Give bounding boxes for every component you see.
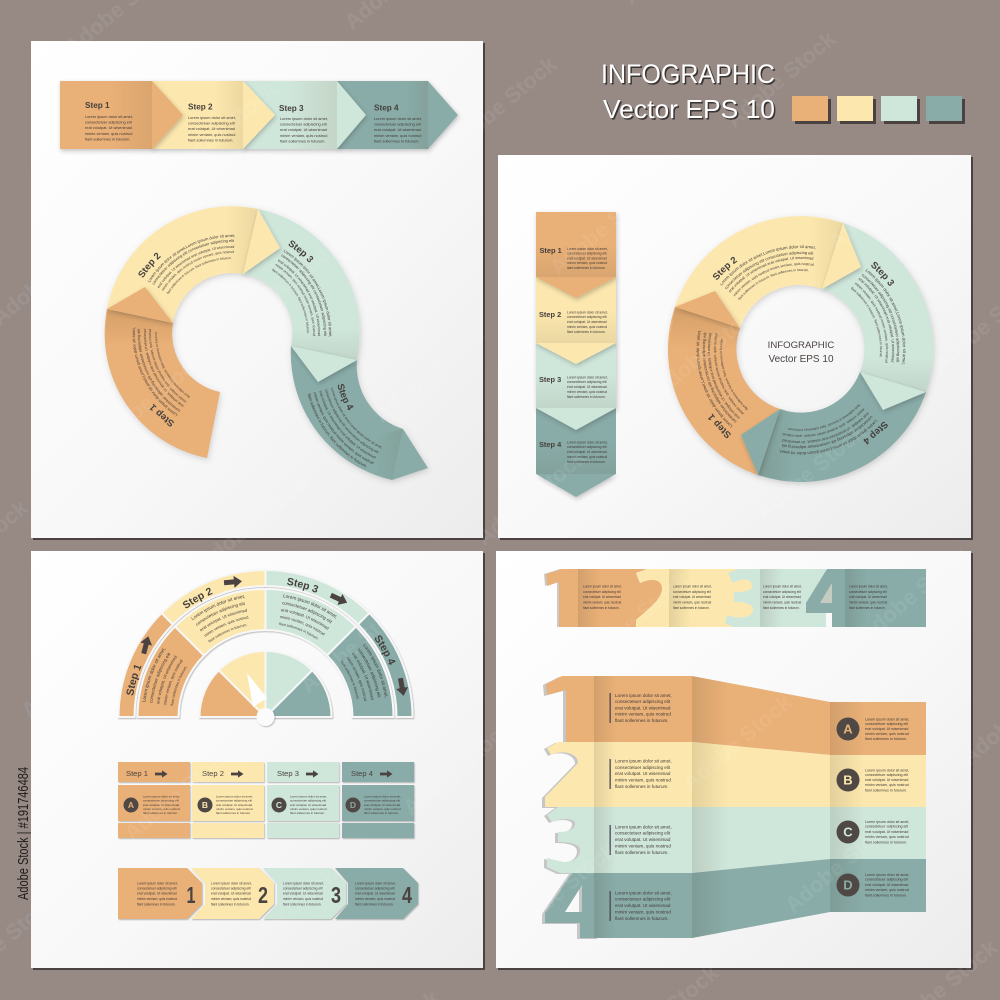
circular process ring: Step 3 (871, 262, 894, 286)
numbered chevron row: flant sollemnes in futurum. (137, 902, 176, 906)
folded ribbon list with numerals: erat volutpat. Ut wisenimad (615, 903, 671, 908)
horizontal arrow process bar: flant sollemnes in futurum. (188, 137, 233, 142)
curved S-shaped process: erat volutpat. Ut wisenimad erat volutpat. Ut wisenimad (278, 260, 321, 336)
step cards grid: consectetuer adipiscing elit (216, 799, 252, 803)
header title: Vector EPS 10 (603, 94, 775, 124)
numeral puzzle strip: Lorem ipsum dolor sit amet, (673, 585, 712, 589)
semicircle gauge: Lorem ipsum dolor sit amet, (141, 645, 167, 704)
semicircle gauge: flant sollemnes in futurum. (170, 664, 188, 707)
horizontal arrow process bar: Step 3 (279, 104, 304, 113)
circular process ring: minim veniam, quis nostrud minim veniam, quis nostrud (734, 262, 814, 296)
numeral puzzle strip: minim veniam, quis nostrud (583, 600, 621, 604)
folded ribbon list with numerals: flant sollemnes in futurum. (615, 916, 669, 921)
circular process ring: consectetuer adipiscing elit consectetuer adipiscing elit (779, 383, 874, 481)
step cards grid: minim veniam, quis nostrud (143, 807, 180, 811)
horizontal arrow process bar: erat volutpat. Ut wisenimad (188, 126, 235, 131)
numeral puzzle strip: minim veniam, quis nostrud (673, 600, 711, 604)
numbered chevron row: 4 (402, 882, 412, 908)
numeral puzzle strip: minim veniam, quis nostrud (763, 600, 801, 604)
horizontal arrow process bar: minim veniam, quis nostrud (188, 132, 235, 137)
circular process ring: erat volutpat. Ut wisenimad erat volutpat. Ut wisenimad (780, 382, 870, 473)
header title: INFOGRAPHIC (601, 59, 775, 89)
folded ribbon list with numerals: erat volutpat. Ut wisenimad (865, 778, 908, 782)
panel: top left (31, 41, 485, 540)
header title: Vector EPS 10 (604, 96, 776, 126)
vertical chevron process column: Step 4 (539, 440, 562, 449)
curved S-shaped process: minim veniam, quis nostrud minim veniam, quis nostrud (148, 329, 186, 402)
numbered chevron row: flant sollemnes in futurum. (211, 902, 250, 906)
step cards grid: erat volutpat. Ut wisenimad (143, 803, 180, 807)
folded ribbon list with numerals: flant sollemnes in futurum. (865, 894, 907, 898)
vertical chevron process column: consectetuer adipiscing elit (567, 315, 607, 319)
semicircle gauge: minim veniam, quis nostrud (336, 655, 377, 703)
numbered chevron row: Lorem ipsum dolor sit amet, (283, 882, 324, 886)
circular process ring: erat volutpat. Ut wisenimad erat volutpat. Ut wisenimad (729, 256, 814, 292)
numeral puzzle strip: Lorem ipsum dolor sit amet, (583, 585, 622, 589)
numbered chevron row: flant sollemnes in futurum. (283, 902, 322, 906)
curved S-shaped process: flant sollemnes in futurum. flant sollemnes in futurum. (155, 332, 190, 398)
curved S-shaped process: flant sollemnes in futurum. flant sollemnes in futurum. (272, 268, 309, 334)
step cards grid: consectetuer adipiscing elit (364, 799, 400, 803)
circular process ring: consectetuer adipiscing elit consectetuer adipiscing elit (725, 251, 814, 290)
folded ribbon list with numerals: erat volutpat. Ut wisenimad (865, 727, 908, 731)
folded ribbon list with numerals: Lorem ipsum dolor sit amet, (615, 824, 672, 830)
numbered chevron row (118, 868, 418, 919)
semicircle gauge: Step 1 (124, 662, 145, 697)
circular process ring: Lorem ipsum dolor sit amet,Lorem ipsum dolor sit amet, (720, 244, 816, 286)
folded ribbon list with numerals: minim veniam, quis nostrud (865, 732, 909, 736)
semicircle gauge: minim veniam, quis nostrud (203, 605, 251, 647)
numbered chevron row: consectetuer adipiscing elit (211, 887, 251, 891)
curved S-shaped process: Lorem ipsum dolor sit amet,Lorem ipsum dolor sit amet, (331, 388, 382, 449)
vertical chevron process column: Lorem ipsum dolor sit amet, (567, 376, 608, 380)
numbered chevron row: flant sollemnes in futurum. (355, 902, 394, 906)
vertical chevron process column: Step 1 (540, 246, 562, 255)
numeral puzzle strip: erat volutpat. Ut wisenimad (763, 595, 801, 599)
numbered chevron row: erat volutpat. Ut wisenimad (283, 892, 323, 896)
vertical chevron process column: erat volutpat. Ut wisenimad (567, 256, 607, 260)
circular process ring: Lorem ipsum dolor sit amet,Lorem ipsum dolor sit amet, (696, 330, 732, 428)
vertical chevron process column: consectetuer adipiscing elit (567, 380, 607, 384)
numbered chevron row: minim veniam, quis nostrud (137, 897, 177, 901)
horizontal arrow process bar: minim veniam, quis nostrud (85, 131, 132, 136)
numeral puzzle strip: Lorem ipsum dolor sit amet, (763, 585, 802, 589)
vertical chevron process column: Lorem ipsum dolor sit amet, (567, 310, 608, 314)
folded ribbon list with numerals: consectetuer adipiscing elit (865, 722, 908, 726)
numeral puzzle strip: flant sollemnes in futurum. (673, 606, 710, 610)
semicircle gauge: Lorem ipsum dolor sit amet, (281, 593, 341, 620)
panel: bottom right (496, 551, 973, 970)
curved S-shaped process: erat volutpat. Ut wisenimad erat volutpat. Ut wisenimad (158, 245, 234, 288)
vertical chevron process column: Step 3 (539, 375, 561, 384)
step cards grid: flant sollemnes in futurum. (216, 811, 251, 815)
stock credit vertical text: Adobe Stock | #191746484 (15, 767, 32, 900)
semicircle gauge: erat volutpat. Ut wisenimad (279, 607, 332, 631)
numbered chevron row: consectetuer adipiscing elit (283, 887, 323, 891)
folded ribbon list with numerals: Lorem ipsum dolor sit amet, (615, 759, 672, 764)
numbered chevron row: 3 (331, 882, 341, 908)
step cards grid: flant sollemnes in futurum. (143, 811, 178, 815)
horizontal arrow process bar: Lorem ipsum dolor sit amet, (188, 115, 236, 120)
folded ribbon list with numerals: minim veniam, quis nostrud (615, 712, 671, 717)
step cards grid: Lorem ipsum dolor sit amet, (364, 794, 401, 798)
numeral puzzle strip: flant sollemnes in futurum. (849, 606, 886, 610)
icon: letter badges: A (128, 800, 134, 810)
numeral puzzle strip: erat volutpat. Ut wisenimad (673, 595, 711, 599)
circular process ring: consectetuer adipiscing elit consectetuer adipiscing elit (702, 332, 736, 422)
step cards grid: Step 2 (202, 769, 224, 778)
curved S-shaped process: Lorem ipsum dolor sit amet,Lorem ipsum dolor sit amet, (284, 250, 332, 337)
folded ribbon list with numerals: consectetuer adipiscing elit (615, 897, 671, 902)
horizontal arrow process bar: flant sollemnes in futurum. (374, 138, 419, 143)
vertical chevron process column: erat volutpat. Ut wisenimad (567, 320, 607, 324)
folded ribbon list with numerals: minim veniam, quis nostrud (615, 909, 671, 914)
semicircle gauge: Step 2 (180, 582, 216, 615)
icon: card arrows (155, 770, 392, 778)
curved S-shaped process (103, 206, 430, 484)
folded ribbon list with numerals: erat volutpat. Ut wisenimad (615, 706, 671, 710)
horizontal arrow process bar: Lorem ipsum dolor sit amet, (280, 116, 328, 121)
semicircle gauge: flant sollemnes in futurum. (332, 660, 368, 702)
folded ribbon list with numerals: flant sollemnes in futurum. (865, 788, 907, 792)
step cards grid: erat volutpat. Ut wisenimad (216, 803, 253, 807)
panel: bottom left (31, 551, 485, 970)
vertical chevron process column: consectetuer adipiscing elit (567, 252, 607, 256)
curved S-shaped process: flant sollemnes in futurum. flant sollemnes in futurum. (166, 257, 232, 294)
step cards grid: Lorem ipsum dolor sit amet, (216, 794, 253, 798)
numbered chevron row: 2 (258, 882, 268, 908)
circular process ring: Lorem ipsum dolor sit amet,Lorem ipsum dolor sit amet, (777, 385, 879, 489)
horizontal arrow process bar: minim veniam, quis nostrud (280, 133, 327, 138)
folded ribbon list with numerals: flant sollemnes in futurum. (615, 718, 669, 723)
step cards grid: Lorem ipsum dolor sit amet, (290, 794, 327, 798)
numbered chevron row: consectetuer adipiscing elit (137, 887, 177, 891)
folded ribbon list with numerals: flant sollemnes in futurum. (865, 737, 907, 741)
numeral puzzle strip: consectetuer adipiscing elit (849, 590, 887, 594)
folded ribbon list with numerals: Lorem ipsum dolor sit amet, (865, 718, 909, 722)
semicircle gauge: minim veniam, quis nostrud (278, 614, 328, 637)
horizontal arrow process bar (60, 81, 458, 149)
step cards grid: consectetuer adipiscing elit (290, 799, 326, 803)
ring centre label: INFOGRAPHIC (768, 340, 834, 351)
colour swatches (792, 96, 965, 124)
curved S-shaped process: Step 4 (338, 384, 354, 410)
numbered chevron row: 1 (186, 882, 196, 908)
numbered chevron row: erat volutpat. Ut wisenimad (355, 892, 395, 896)
curved S-shaped process: minim veniam, quis nostrud minim veniam, quis nostrud (275, 264, 316, 336)
curved S-shaped process: minim veniam, quis nostrud minim veniam, quis nostrud (314, 392, 374, 464)
numeral shadows (542, 677, 597, 939)
numbered chevron row: Lorem ipsum dolor sit amet, (211, 882, 252, 886)
icon: ribbon letter badges: C (843, 825, 853, 840)
numeral puzzle strip: minim veniam, quis nostrud (849, 600, 887, 604)
vertical chevron process column: minim veniam, quis nostrud (567, 455, 607, 459)
folded ribbon list with numerals: flant sollemnes in futurum. (615, 850, 669, 855)
vertical chevron process column: Lorem ipsum dolor sit amet, (567, 440, 608, 444)
curved S-shaped process: erat volutpat. Ut wisenimad erat volutpat. Ut wisenimad (320, 390, 376, 459)
numbered chevron row: erat volutpat. Ut wisenimad (137, 892, 177, 896)
vertical chevron process column: Step 2 (539, 310, 561, 319)
icon: ribbon letter badges (836, 718, 860, 896)
step cards grid: minim veniam, quis nostrud (216, 807, 253, 811)
curved S-shaped process: Step 1 (150, 404, 174, 426)
semicircle gauge: flant sollemnes in futurum. (208, 615, 249, 651)
numeral puzzle strip: consectetuer adipiscing elit (583, 590, 621, 594)
semicircle gauge: consectetuer adipiscing elit (148, 649, 172, 705)
numbered chevron row: minim veniam, quis nostrud (283, 897, 323, 901)
curved S-shaped process: Step 3 (288, 240, 314, 262)
vertical chevron process column: erat volutpat. Ut wisenimad (567, 385, 607, 389)
horizontal arrow process bar: flant sollemnes in futurum. (280, 138, 325, 143)
folded ribbon list with numerals: erat volutpat. Ut wisenimad (615, 837, 671, 842)
vertical chevron process column: minim veniam, quis nostrud (567, 390, 607, 394)
curved S-shaped process: consectetuer adipiscing elit consectetuer adipiscing elit (152, 239, 234, 285)
curved S-shaped process: consectetuer adipiscing elit consectetuer adipiscing elit (137, 328, 180, 412)
numbered chevron row: erat volutpat. Ut wisenimad (211, 892, 251, 896)
step cards grid: consectetuer adipiscing elit (143, 799, 179, 803)
circular process ring: Step 2 (712, 256, 738, 280)
horizontal arrow process bar: Step 1 (85, 101, 110, 110)
semicircle gauge: Lorem ipsum dolor sit amet, (351, 643, 400, 700)
folded ribbon list with numerals: flant sollemnes in futurum. (865, 840, 907, 844)
folded ribbon list with numerals: erat volutpat. Ut wisenimad (865, 830, 908, 834)
circular process ring: Step 4 (864, 422, 888, 444)
semicircle gauge (118, 571, 415, 728)
semicircle gauge: consectetuer adipiscing elit (194, 590, 248, 637)
vertical chevron process column: flant sollemnes in futurum. (567, 395, 606, 399)
folded ribbon list with numerals: erat volutpat. Ut wisenimad (865, 883, 908, 887)
horizontal arrow process bar: erat volutpat. Ut wisenimad (85, 125, 132, 130)
numeral puzzle strip (544, 569, 926, 627)
horizontal arrow process bar: consectetuer adipiscing elit (85, 120, 133, 125)
step cards grid: erat volutpat. Ut wisenimad (290, 803, 327, 807)
numeral puzzle strip: erat volutpat. Ut wisenimad (583, 595, 621, 599)
folded ribbon list with numerals: consectetuer adipiscing elit (865, 825, 908, 829)
folded ribbon list with numerals: consectetuer adipiscing elit (615, 831, 671, 836)
horizontal arrow process bar: erat volutpat. Ut wisenimad (280, 127, 327, 132)
step cards grid: Step 4 (351, 769, 373, 778)
horizontal arrow process bar: Step 2 (188, 102, 213, 112)
semicircle gauge: Step 4 (368, 633, 401, 669)
semicircle gauge: consectetuer adipiscing elit (280, 600, 336, 625)
horizontal arrow process bar: Step 4 (374, 104, 399, 112)
folded ribbon list with numerals: Lorem ipsum dolor sit amet, (865, 768, 909, 772)
folded ribbon list with numerals: Lorem ipsum dolor sit amet, (615, 693, 672, 698)
step cards grid: Lorem ipsum dolor sit amet, (143, 794, 180, 798)
header title: INFOGRAPHIC (602, 60, 776, 90)
panel: top right (498, 155, 973, 540)
semicircle gauge: minim veniam, quis nostrud (162, 657, 184, 706)
vertical chevron process column: flant sollemnes in futurum. (567, 266, 606, 270)
circular process ring: minim veniam, quis nostrud minim veniam, quis nostrud (781, 379, 865, 465)
folded ribbon list with numerals: Lorem ipsum dolor sit amet, (865, 820, 909, 824)
header title (601, 59, 776, 126)
vertical chevron process column: erat volutpat. Ut wisenimad (567, 450, 607, 454)
numbered chevron row: Lorem ipsum dolor sit amet, (355, 882, 396, 886)
numbered chevron row: minim veniam, quis nostrud (211, 897, 251, 901)
circular process ring: flant sollemnes in futurum. flant sollemnes in futurum. (828, 286, 906, 360)
semicircle gauge: Lorem ipsum dolor sit amet, (190, 582, 247, 632)
circular process ring: minim veniam, quis nostrud minim veniam, quis nostrud (828, 282, 915, 364)
curved S-shaped process: Lorem ipsum dolor sit amet,Lorem ipsum dolor sit amet, (148, 234, 235, 282)
curved S-shaped process: erat volutpat. Ut wisenimad erat volutpat. Ut wisenimad (143, 328, 184, 407)
semicircle gauge: erat volutpat. Ut wisenimad (341, 651, 385, 703)
icon: step arrows (138, 575, 409, 697)
circular process ring: Lorem ipsum dolor sit amet,Lorem ipsum dolor sit amet, (866, 268, 906, 364)
text bars (610, 693, 611, 921)
step cards grid (118, 762, 414, 838)
step cards grid: minim veniam, quis nostrud (290, 807, 327, 811)
step cards grid: erat volutpat. Ut wisenimad (364, 803, 401, 807)
semicircle gauge: consectetuer adipiscing elit (346, 647, 392, 700)
horizontal arrow process bar: Lorem ipsum dolor sit amet, (85, 114, 133, 119)
numbered chevron row: consectetuer adipiscing elit (355, 887, 395, 891)
vertical chevron process column: Lorem ipsum dolor sit amet, (567, 247, 608, 251)
icon: letter badges: B (202, 800, 208, 810)
icon: letter badges: D (350, 800, 356, 810)
folded ribbon list with numerals: consectetuer adipiscing elit (615, 699, 671, 704)
folded ribbon list with numerals: Lorem ipsum dolor sit amet, (615, 890, 672, 896)
circular process ring: erat volutpat. Ut wisenimad erat volutpat. Ut wisenimad (707, 332, 740, 419)
semicircle gauge: flant sollemnes in futurum. (277, 622, 321, 641)
ring centre label: Vector EPS 10 (768, 354, 834, 365)
curved S-shaped process: Step 2 (138, 252, 161, 278)
horizontal arrow process bar: minim veniam, quis nostrud (374, 133, 421, 138)
vertical chevron process column (536, 212, 616, 497)
icon: letter badges (124, 798, 360, 812)
circular process ring: erat volutpat. Ut wisenimad erat volutpat. Ut wisenimad (830, 277, 923, 364)
circular process ring: flant sollemnes in futurum. flant sollemnes in futurum. (785, 379, 861, 456)
semicircle gauge: erat volutpat. Ut wisenimad (155, 653, 178, 706)
folded ribbon list with numerals: consectetuer adipiscing elit (865, 773, 908, 777)
numeral puzzle strip: flant sollemnes in futurum. (763, 606, 800, 610)
folded ribbon list with numerals: consectetuer adipiscing elit (615, 765, 671, 770)
folded ribbon list with numerals: flant sollemnes in futurum. (615, 784, 669, 789)
curved S-shaped process: consectetuer adipiscing elit consectetuer adipiscing elit (325, 389, 378, 454)
vertical chevron process column: consectetuer adipiscing elit (567, 445, 607, 449)
circular process ring: flant sollemnes in futurum. flant sollemnes in futurum. (738, 268, 809, 300)
icon: ribbon letter badges: D (843, 878, 853, 893)
step cards grid: flant sollemnes in futurum. (290, 811, 325, 815)
semicircle gauge: Step 3 (285, 576, 321, 596)
horizontal arrow process bar: erat volutpat. Ut wisenimad (374, 127, 421, 132)
curved S-shaped process: flant sollemnes in futurum. flant sollemnes in futurum. (308, 394, 366, 468)
folded ribbon list with numerals: minim veniam, quis nostrud (615, 843, 671, 848)
folded ribbon list with numerals: consectetuer adipiscing elit (865, 878, 908, 882)
horizontal arrow process bar: consectetuer adipiscing elit (374, 122, 422, 127)
ring centre label (768, 340, 834, 365)
numbered chevron row: Lorem ipsum dolor sit amet, (137, 882, 178, 886)
step cards grid: flant sollemnes in futurum. (364, 811, 399, 815)
curved S-shaped process: Lorem ipsum dolor sit amet,Lorem ipsum dolor sit amet, (132, 328, 178, 417)
numeral puzzle strip: erat volutpat. Ut wisenimad (849, 595, 887, 599)
vertical chevron process column: minim veniam, quis nostrud (567, 261, 607, 265)
folded ribbon list with numerals: erat volutpat. Ut wisenimad (615, 771, 671, 776)
curved S-shaped process: consectetuer adipiscing elit consectetuer adipiscing elit (281, 254, 327, 336)
numeral puzzle strip: consectetuer adipiscing elit (763, 590, 801, 594)
vertical chevron process column: minim veniam, quis nostrud (567, 325, 607, 329)
horizontal arrow process bar: consectetuer adipiscing elit (188, 121, 236, 126)
numeral puzzle strip: flant sollemnes in futurum. (583, 606, 620, 610)
icon: letter badges: C (276, 800, 282, 810)
folded ribbon list with numerals: minim veniam, quis nostrud (865, 783, 909, 787)
semicircle gauge: erat volutpat. Ut wisenimad (199, 597, 250, 642)
folded ribbon list with numerals: minim veniam, quis nostrud (865, 835, 909, 839)
folded ribbon list with numerals: minim veniam, quis nostrud (615, 778, 671, 782)
horizontal arrow process bar: consectetuer adipiscing elit (280, 122, 328, 127)
step cards grid: Step 1 (126, 769, 148, 778)
circular process ring: Step 1 (708, 414, 731, 438)
curved S-shaped process: minim veniam, quis nostrud minim veniam, quis nostrud (162, 250, 234, 291)
folded ribbon list with numerals: minim veniam, quis nostrud (865, 888, 909, 892)
circular process ring (666, 216, 936, 486)
numeral puzzle strip: Lorem ipsum dolor sit amet, (849, 585, 888, 589)
gauge needle and hub (247, 673, 274, 726)
icon: ribbon letter badges: B (843, 773, 853, 788)
step cards grid: Step 3 (277, 769, 299, 778)
vertical chevron process column: flant sollemnes in futurum. (567, 460, 606, 464)
horizontal arrow process bar: flant sollemnes in futurum. (85, 136, 130, 141)
circular process ring: consectetuer adipiscing elit consectetuer adipiscing elit (862, 274, 900, 362)
horizontal arrow process bar: Lorem ipsum dolor sit amet, (374, 116, 422, 121)
icon: ribbon letter badges: A (843, 722, 853, 737)
vertical chevron process column: flant sollemnes in futurum. (567, 330, 606, 334)
circular process ring: minim veniam, quis nostrud minim veniam, quis nostrud (713, 333, 744, 414)
circular process ring: flant sollemnes in futurum. flant sollemnes in futurum. (720, 338, 748, 410)
folded ribbon list with numerals: Lorem ipsum dolor sit amet, (865, 873, 909, 877)
folded ribbon list with numerals (542, 676, 926, 939)
numeral puzzle strip: consectetuer adipiscing elit (673, 590, 711, 594)
step cards grid: minim veniam, quis nostrud (364, 807, 401, 811)
numbered chevron row: minim veniam, quis nostrud (355, 897, 395, 901)
